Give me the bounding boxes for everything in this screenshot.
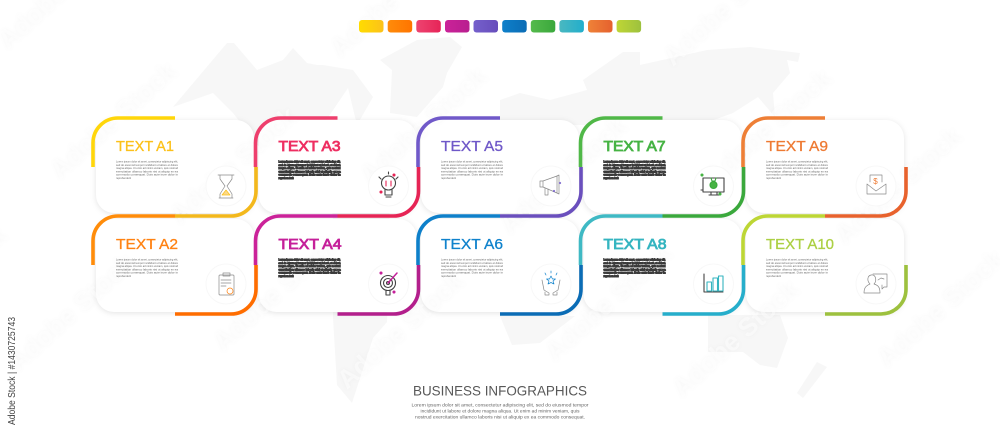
panel: A2: magna aliqua. Ut enim ad minim veniam, quis nostrud bbox=[116, 264, 178, 268]
panel: A8: Lorem ipsum dolor sit amet, consectetur adipiscing elit, bbox=[604, 258, 666, 262]
world map background bbox=[173, 37, 827, 403]
watermark overlay: Adobe Stock bbox=[494, 110, 633, 239]
panel: A1: magna aliqua. Ut enim ad minim veniam, quis nostrud bbox=[116, 166, 178, 170]
panel: A5: commodo consequat. Duis aute irure dolor in bbox=[441, 173, 504, 177]
watermark overlay: Adobe Stock bbox=[164, 100, 303, 229]
panel: A2: TEXT A2 bbox=[116, 237, 178, 253]
panel: A5: reprehenderit bbox=[441, 176, 456, 180]
panel: A7: commodo consequat. Duis aute irure dolor in bbox=[604, 173, 666, 177]
icon: megaphone bbox=[540, 175, 561, 195]
panel: A6: magna aliqua. Ut enim ad minim veniam, quis nostrud bbox=[441, 264, 503, 268]
stock id label: Adobe Stock | #1430725743 bbox=[7, 317, 18, 425]
panel: A9: reprehenderit bbox=[766, 176, 781, 180]
watermark overlay: Adobe Stock bbox=[207, 227, 346, 356]
panel: A10: sed do eiusmod tempor incididunt ut labore et dolore bbox=[766, 261, 828, 265]
panel: A4: commodo consequat. Duis aute irure dolor in bbox=[278, 271, 341, 275]
panel: A10: commodo consequat. Duis aute irure dolor in bbox=[766, 271, 829, 275]
panel: A6: sed do eiusmod tempor incididunt ut labore et dolore bbox=[441, 261, 503, 265]
watermark overlay: Adobe Stock bbox=[829, 120, 968, 249]
panel: A6: TEXT A6 bbox=[441, 237, 503, 253]
panel: A7 bbox=[580, 118, 744, 216]
panel: A4: Lorem ipsum dolor sit amet, consectetur adipiscing elit, bbox=[278, 258, 341, 262]
panel: A3: commodo consequat. Duis aute irure dolor in bbox=[278, 173, 341, 177]
panel: card backgrounds bbox=[96, 120, 904, 312]
icon: envelope with dollar: $ bbox=[873, 177, 878, 186]
panel: A2: reprehenderit bbox=[116, 274, 131, 278]
panel: A1: exercitation ullamco laboris nisi ut aliquip ex ea bbox=[116, 169, 179, 173]
panel: A1: sed do eiusmod tempor incididunt ut labore et dolore bbox=[116, 163, 178, 167]
panel: A10: magna aliqua. Ut enim ad minim veniam, quis nostrud bbox=[766, 264, 828, 268]
panel: A8 bbox=[580, 216, 744, 314]
heading: business infographics: BUSINESS INFOGRAPHICS bbox=[413, 384, 587, 398]
text block: description: incididunt ut labore et dolore magna aliqua. Ut enim ad minim veniam, quis bbox=[420, 408, 580, 414]
panel: A5: exercitation ullamco laboris nisi ut aliquip ex ea bbox=[441, 169, 504, 173]
panel: A9: sed do eiusmod tempor incididunt ut labore et dolore bbox=[766, 163, 828, 167]
panel: A3: reprehenderit bbox=[278, 176, 294, 180]
text block: description: Lorem ipsum dolor sit amet, consectetur adipiscing elit, sed do eiusmod tempor bbox=[412, 402, 589, 408]
panel: A7: reprehenderit bbox=[604, 176, 619, 180]
icon: light bulb bbox=[379, 172, 398, 197]
panel: A6: Lorem ipsum dolor sit amet, consectetur adipiscing elit, bbox=[441, 258, 503, 262]
panel: A10: exercitation ullamco laboris nisi ut aliquip ex ea bbox=[766, 267, 829, 271]
watermark overlay: Adobe Stock bbox=[44, 55, 183, 184]
panel: A3: TEXT A3 bbox=[278, 139, 340, 155]
panel: A2: commodo consequat. Duis aute irure dolor in bbox=[116, 271, 179, 275]
panel: A4: TEXT A4 bbox=[278, 237, 342, 253]
text block: description: nostrud exercitation ullamco laboris nisi ut aliquip ex ea commodo consequat. bbox=[415, 414, 585, 420]
panel: A7: sed do eiusmod tempor incididunt ut labore et dolore bbox=[604, 163, 666, 167]
panel: A4: magna aliqua. Ut enim ad minim veniam, quis nostrud bbox=[278, 264, 341, 268]
icon: envelope with dollar bbox=[867, 175, 886, 194]
panel: A8: commodo consequat. Duis aute irure dolor in bbox=[604, 271, 666, 275]
panel: A1: Lorem ipsum dolor sit amet, consectetur adipiscing elit, bbox=[116, 160, 178, 164]
panel: A9: commodo consequat. Duis aute irure dolor in bbox=[766, 173, 829, 177]
panel: A1 bbox=[93, 118, 256, 216]
icon: target bbox=[380, 272, 397, 295]
watermark overlay: Adobe Stock bbox=[539, 237, 678, 366]
panel: A10 bbox=[743, 216, 906, 314]
panel: A7: exercitation ullamco laboris nisi ut aliquip ex ea bbox=[604, 169, 666, 173]
panel: A6: reprehenderit bbox=[441, 274, 456, 278]
panel: A2: sed do eiusmod tempor incididunt ut labore et dolore bbox=[116, 261, 178, 265]
panel: A8: reprehenderit bbox=[604, 274, 619, 278]
panel: A4: sed do eiusmod tempor incididunt ut labore et dolore bbox=[278, 261, 341, 265]
icon: person with speech bubble bbox=[864, 274, 887, 293]
panel: A1: commodo consequat. Duis aute irure dolor in bbox=[116, 173, 179, 177]
panel: A6: commodo consequat. Duis aute irure dolor in bbox=[441, 271, 504, 275]
panel: A7: magna aliqua. Ut enim ad minim veniam, quis nostrud bbox=[604, 166, 666, 170]
panel: A5: sed do eiusmod tempor incididunt ut labore et dolore bbox=[441, 163, 503, 167]
panel: A8: TEXT A8 bbox=[604, 237, 666, 253]
watermark overlay: Adobe Stock bbox=[331, 265, 470, 394]
panel: A6: exercitation ullamco laboris nisi ut aliquip ex ea bbox=[441, 267, 504, 271]
panel: A9 bbox=[743, 118, 906, 216]
panel: A9: exercitation ullamco laboris nisi ut aliquip ex ea bbox=[766, 169, 829, 173]
panel: A7: Lorem ipsum dolor sit amet, consectetur adipiscing elit, bbox=[604, 160, 666, 164]
panel: A10: TEXT A10 bbox=[766, 237, 834, 253]
panel: A3: sed do eiusmod tempor incididunt ut labore et dolore bbox=[278, 163, 341, 167]
panel: A2 bbox=[93, 216, 256, 314]
panel: A8: sed do eiusmod tempor incididunt ut labore et dolore bbox=[604, 261, 666, 265]
panel: A9: magna aliqua. Ut enim ad minim veniam, quis nostrud bbox=[766, 166, 828, 170]
text block: description bbox=[412, 402, 589, 420]
panel: A4 bbox=[256, 216, 418, 314]
panel: A3: Lorem ipsum dolor sit amet, consectetur adipiscing elit, bbox=[278, 160, 341, 164]
panel: A2: Lorem ipsum dolor sit amet, consectetur adipiscing elit, bbox=[116, 258, 178, 262]
icon: computer monitor bbox=[701, 174, 724, 195]
icon: bar chart bbox=[704, 274, 723, 292]
watermark overlay: Adobe Stock bbox=[666, 273, 805, 402]
watermark overlay: Adobe Stock bbox=[699, 62, 838, 191]
color legend swatches bbox=[359, 20, 641, 32]
panel: A10: Lorem ipsum dolor sit amet, consectetur adipiscing elit, bbox=[766, 258, 828, 262]
panel: A1: TEXT A1 bbox=[116, 139, 174, 155]
icon: hands with star bbox=[542, 271, 560, 295]
panel: A2: exercitation ullamco laboris nisi ut aliquip ex ea bbox=[116, 267, 179, 271]
icon: hourglass bbox=[218, 175, 234, 198]
panel: A5: Lorem ipsum dolor sit amet, consectetur adipiscing elit, bbox=[441, 160, 503, 164]
panel: A3: magna aliqua. Ut enim ad minim veniam, quis nostrud bbox=[278, 166, 341, 170]
panel: A7: TEXT A7 bbox=[604, 139, 666, 155]
panel: A9: Lorem ipsum dolor sit amet, consectetur adipiscing elit, bbox=[766, 160, 828, 164]
watermark overlay: Adobe Stock bbox=[2, 247, 141, 376]
panel: A5 bbox=[418, 118, 581, 216]
panel: A5: magna aliqua. Ut enim ad minim veniam, quis nostrud bbox=[441, 166, 503, 170]
panel: A9: TEXT A9 bbox=[766, 139, 828, 155]
panel: A8: magna aliqua. Ut enim ad minim veniam, quis nostrud bbox=[604, 264, 666, 268]
panel: A8: exercitation ullamco laboris nisi ut aliquip ex ea bbox=[604, 267, 666, 271]
panel: A10: reprehenderit bbox=[766, 274, 781, 278]
panel: A4: reprehenderit bbox=[278, 274, 294, 278]
panel: A3: exercitation ullamco laboris nisi ut aliquip ex ea bbox=[278, 169, 341, 173]
panel: A3 bbox=[256, 118, 418, 216]
panel: A1: reprehenderit bbox=[116, 176, 131, 180]
panel: A6 bbox=[418, 216, 581, 314]
panel: A5: TEXT A5 bbox=[441, 139, 503, 155]
icon: clipboard bbox=[219, 273, 234, 295]
watermark overlay: Adobe Stock bbox=[354, 60, 493, 189]
panel: A4: exercitation ullamco laboris nisi ut aliquip ex ea bbox=[278, 267, 341, 271]
